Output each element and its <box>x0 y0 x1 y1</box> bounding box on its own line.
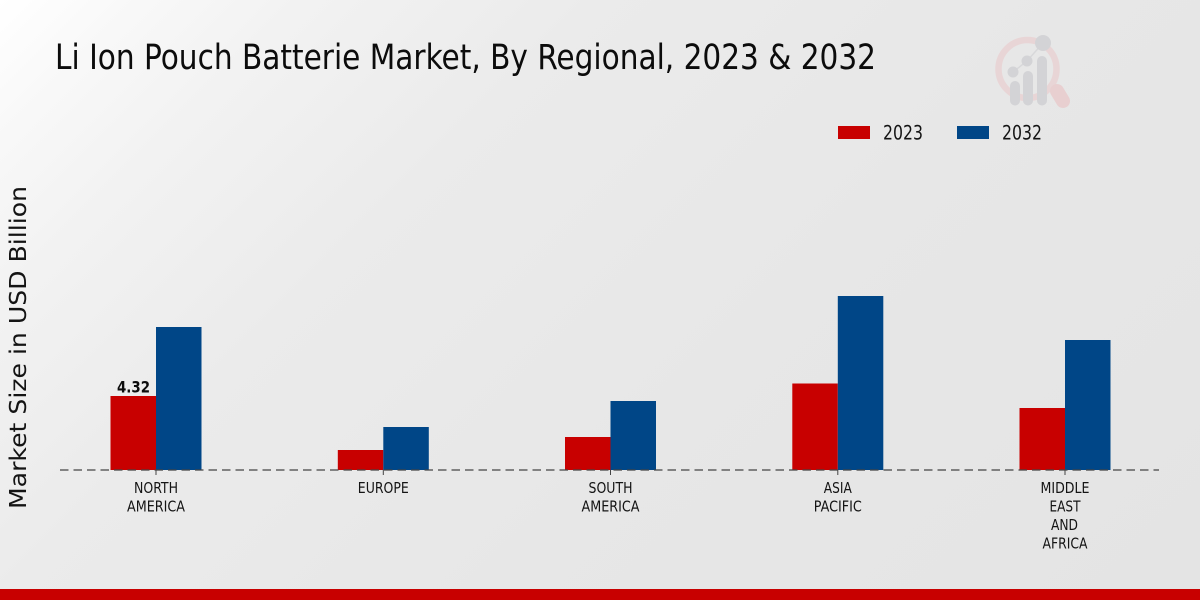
label: Asia Pacific: ASIA <box>824 479 852 497</box>
y axis label: Market Size in USD Billion <box>6 186 32 509</box>
legend item: 2032 <box>957 122 1042 144</box>
label: South America <box>582 479 640 516</box>
label: North America <box>127 479 185 516</box>
label: Middle East and Africa: AFRICA <box>1042 534 1088 552</box>
title: Li Ion Pouch Batterie Market, By Regional, 2023 & 2032 <box>55 38 876 78</box>
legend item: 2023: 2023 <box>883 122 923 144</box>
legend item: 2023 <box>838 122 923 144</box>
label: Middle East and Africa: MIDDLE <box>1040 479 1090 497</box>
label: South America: AMERICA <box>582 498 640 516</box>
label: South America: SOUTH <box>588 479 632 497</box>
label: North America: AMERICA <box>127 498 185 516</box>
label: North America: NORTH <box>134 479 178 497</box>
icon: watermark logo <box>998 35 1063 106</box>
label: Middle East and Africa: AND <box>1051 516 1078 534</box>
footer bar <box>0 589 1200 600</box>
group: Europe <box>338 427 429 470</box>
bar chart <box>110 296 1110 470</box>
x axis labels <box>127 479 1090 552</box>
label: Middle East and Africa <box>1040 479 1090 552</box>
group: South America <box>565 401 656 470</box>
legend item: 2032: 2032 <box>1002 122 1042 144</box>
data label: 4.32 <box>117 378 150 396</box>
group: Asia Pacific <box>792 296 883 470</box>
label: Asia Pacific: PACIFIC <box>814 498 862 516</box>
label: Europe: EUROPE <box>358 479 409 497</box>
label: Middle East and Africa: EAST <box>1050 498 1081 516</box>
group: Middle East and Africa <box>1020 340 1110 470</box>
legend <box>838 122 1042 144</box>
x axis baseline <box>60 470 1159 475</box>
label: Asia Pacific <box>814 479 862 516</box>
group: North America <box>110 327 202 470</box>
